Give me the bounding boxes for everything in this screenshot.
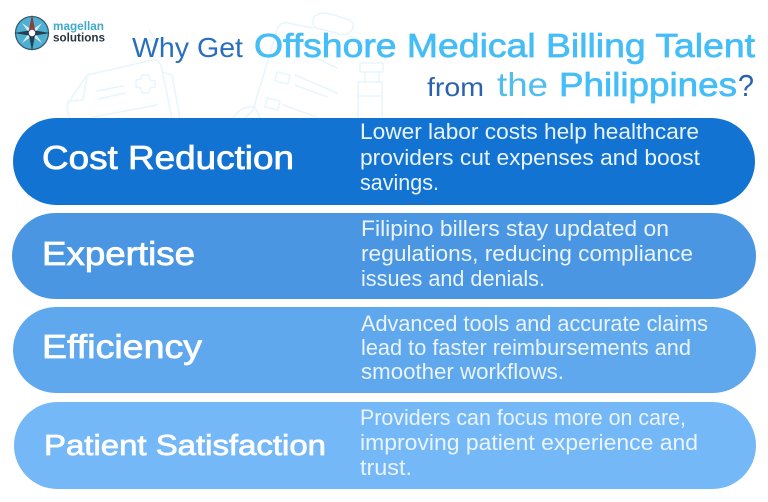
text: patient satisfaction description <box>360 405 698 480</box>
panel: Efficiency <box>13 307 756 393</box>
text: cost reduction description: providers cut expenses and boost <box>360 145 700 170</box>
title: Philippines <box>559 66 737 103</box>
title: Why Get <box>132 32 243 63</box>
panel: Patient Satisfaction <box>14 402 756 489</box>
heading: Expertise: Expertise <box>42 235 195 272</box>
title: ? <box>738 68 754 103</box>
heading: Patient Satisfaction: Patient Satisfaction <box>44 430 326 462</box>
text: cost reduction description <box>360 119 700 195</box>
text: cost reduction description: Lower labor costs help healthcare <box>360 119 699 144</box>
heading: Cost Reduction: Cost Reduction <box>42 139 294 176</box>
logo wordmark <box>53 19 105 44</box>
text: efficiency description: smoother workflows. <box>361 359 564 384</box>
logo wordmark: magellan <box>53 19 104 33</box>
text: expertise description: regulations, reducing compliance <box>361 241 693 266</box>
title: Offshore Medical Billing Talent <box>254 27 755 64</box>
text: patient satisfaction description: Providers can focus more on care, <box>360 405 686 430</box>
logo wordmark: solutions <box>53 30 105 44</box>
text: patient satisfaction description: trust. <box>360 455 412 480</box>
panel: Expertise <box>12 213 756 299</box>
text: patient satisfaction description: improving patient experience and <box>360 430 698 455</box>
heading: Efficiency: Efficiency <box>42 328 203 365</box>
title <box>132 27 755 103</box>
title: the <box>497 66 548 103</box>
text: efficiency description: Advanced tools and accurate claims <box>361 311 708 336</box>
background illustration: medical document and clipboard <box>67 13 385 118</box>
logo: Magellan Solutions <box>14 15 105 51</box>
text: efficiency description: lead to faster reimbursements and <box>361 335 691 360</box>
text: expertise description: Filipino billers stay updated on <box>361 216 669 241</box>
text: cost reduction description: savings. <box>360 170 439 195</box>
text: expertise description <box>361 216 693 291</box>
text: expertise description: issues and denials. <box>361 266 545 291</box>
icon: compass <box>14 15 50 51</box>
text: efficiency description <box>361 311 708 384</box>
title: from <box>427 72 484 102</box>
panel: Cost Reduction <box>13 118 755 205</box>
